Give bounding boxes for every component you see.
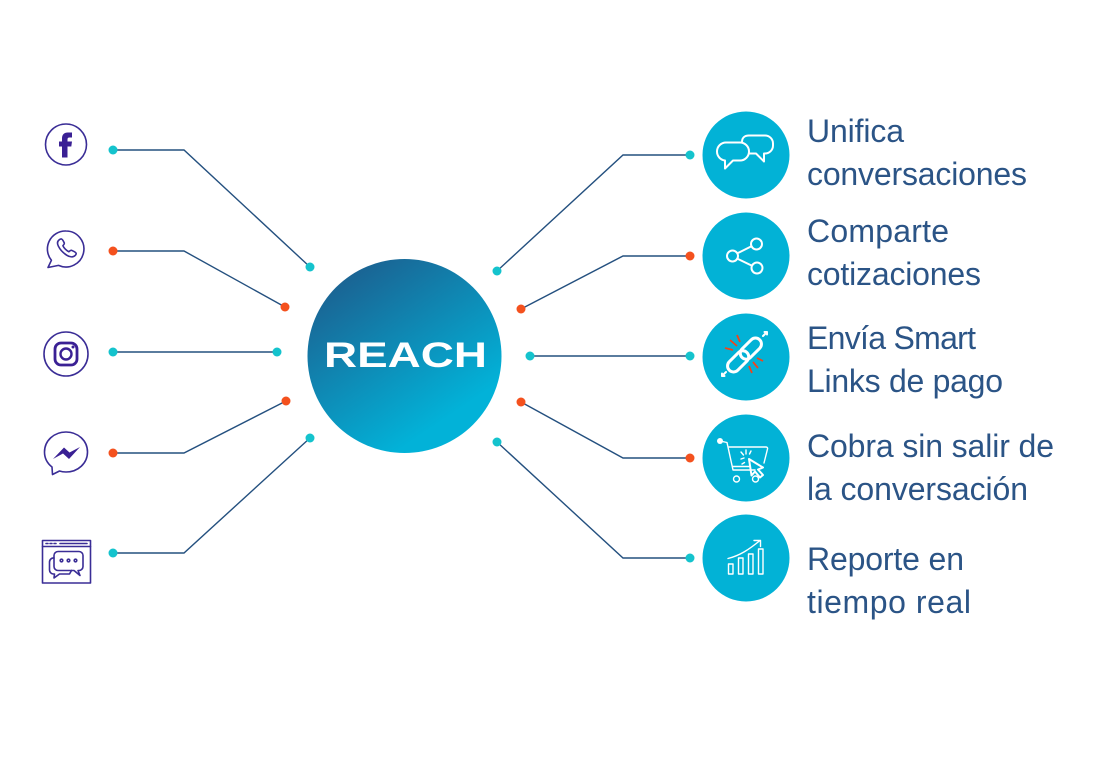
feature: Comparte cotizaciones — [702, 212, 981, 300]
connector: Messenger to hub — [108, 396, 290, 458]
connector: hub to Envía — [526, 352, 694, 360]
central hub: REACH logo: REACH — [324, 336, 487, 375]
feature: Reporte en tiempo real — [702, 514, 971, 620]
feature: Cobra sin salir de la conversación — [702, 414, 1054, 507]
feature: Unifica conversaciones: conversaciones — [807, 156, 1027, 192]
connector: Instagram to hub — [108, 348, 282, 356]
icon: shopping cart with cursor — [702, 414, 790, 502]
icon: chain link — [702, 314, 790, 400]
icon: Facebook — [46, 124, 86, 165]
connector: hub to Reporte — [492, 438, 694, 562]
connector: Facebook to hub — [108, 146, 314, 272]
feature: Cobra sin salir de la conversación: Cobra sin salir de — [807, 428, 1054, 464]
connector: hub to Unifica — [492, 150, 694, 276]
feature: Reporte en tiempo real: Reporte en — [807, 541, 964, 577]
connector: WhatsApp to hub — [108, 246, 290, 312]
central hub: REACH logo — [308, 259, 502, 453]
icon: share — [702, 212, 790, 300]
icon: growth chart — [702, 514, 790, 602]
feature: Envía Smart Links de pago: Links de pago — [807, 363, 1003, 399]
feature: Envía Smart Links de pago: Envía Smart — [807, 320, 976, 356]
feature: Unifica conversaciones: Unifica — [807, 113, 904, 149]
connector: hub to Cobra — [516, 398, 694, 462]
feature: Envía Smart Links de pago — [702, 314, 1003, 400]
icon: chat bubbles — [702, 112, 790, 198]
icon: web chat window — [42, 540, 90, 583]
connector: hub to Comparte — [516, 252, 694, 314]
connector: web chat to hub — [108, 434, 314, 558]
icon: Instagram — [44, 332, 88, 376]
feature: Comparte cotizaciones: Comparte — [807, 213, 949, 249]
feature: Cobra sin salir de la conversación: la conversación — [807, 471, 1028, 507]
feature: Comparte cotizaciones: cotizaciones — [807, 256, 981, 292]
feature: Reporte en tiempo real: tiempo real — [807, 584, 971, 620]
icon: WhatsApp — [47, 231, 84, 268]
icon: Messenger — [44, 432, 88, 474]
feature: Unifica conversaciones — [702, 112, 1027, 198]
